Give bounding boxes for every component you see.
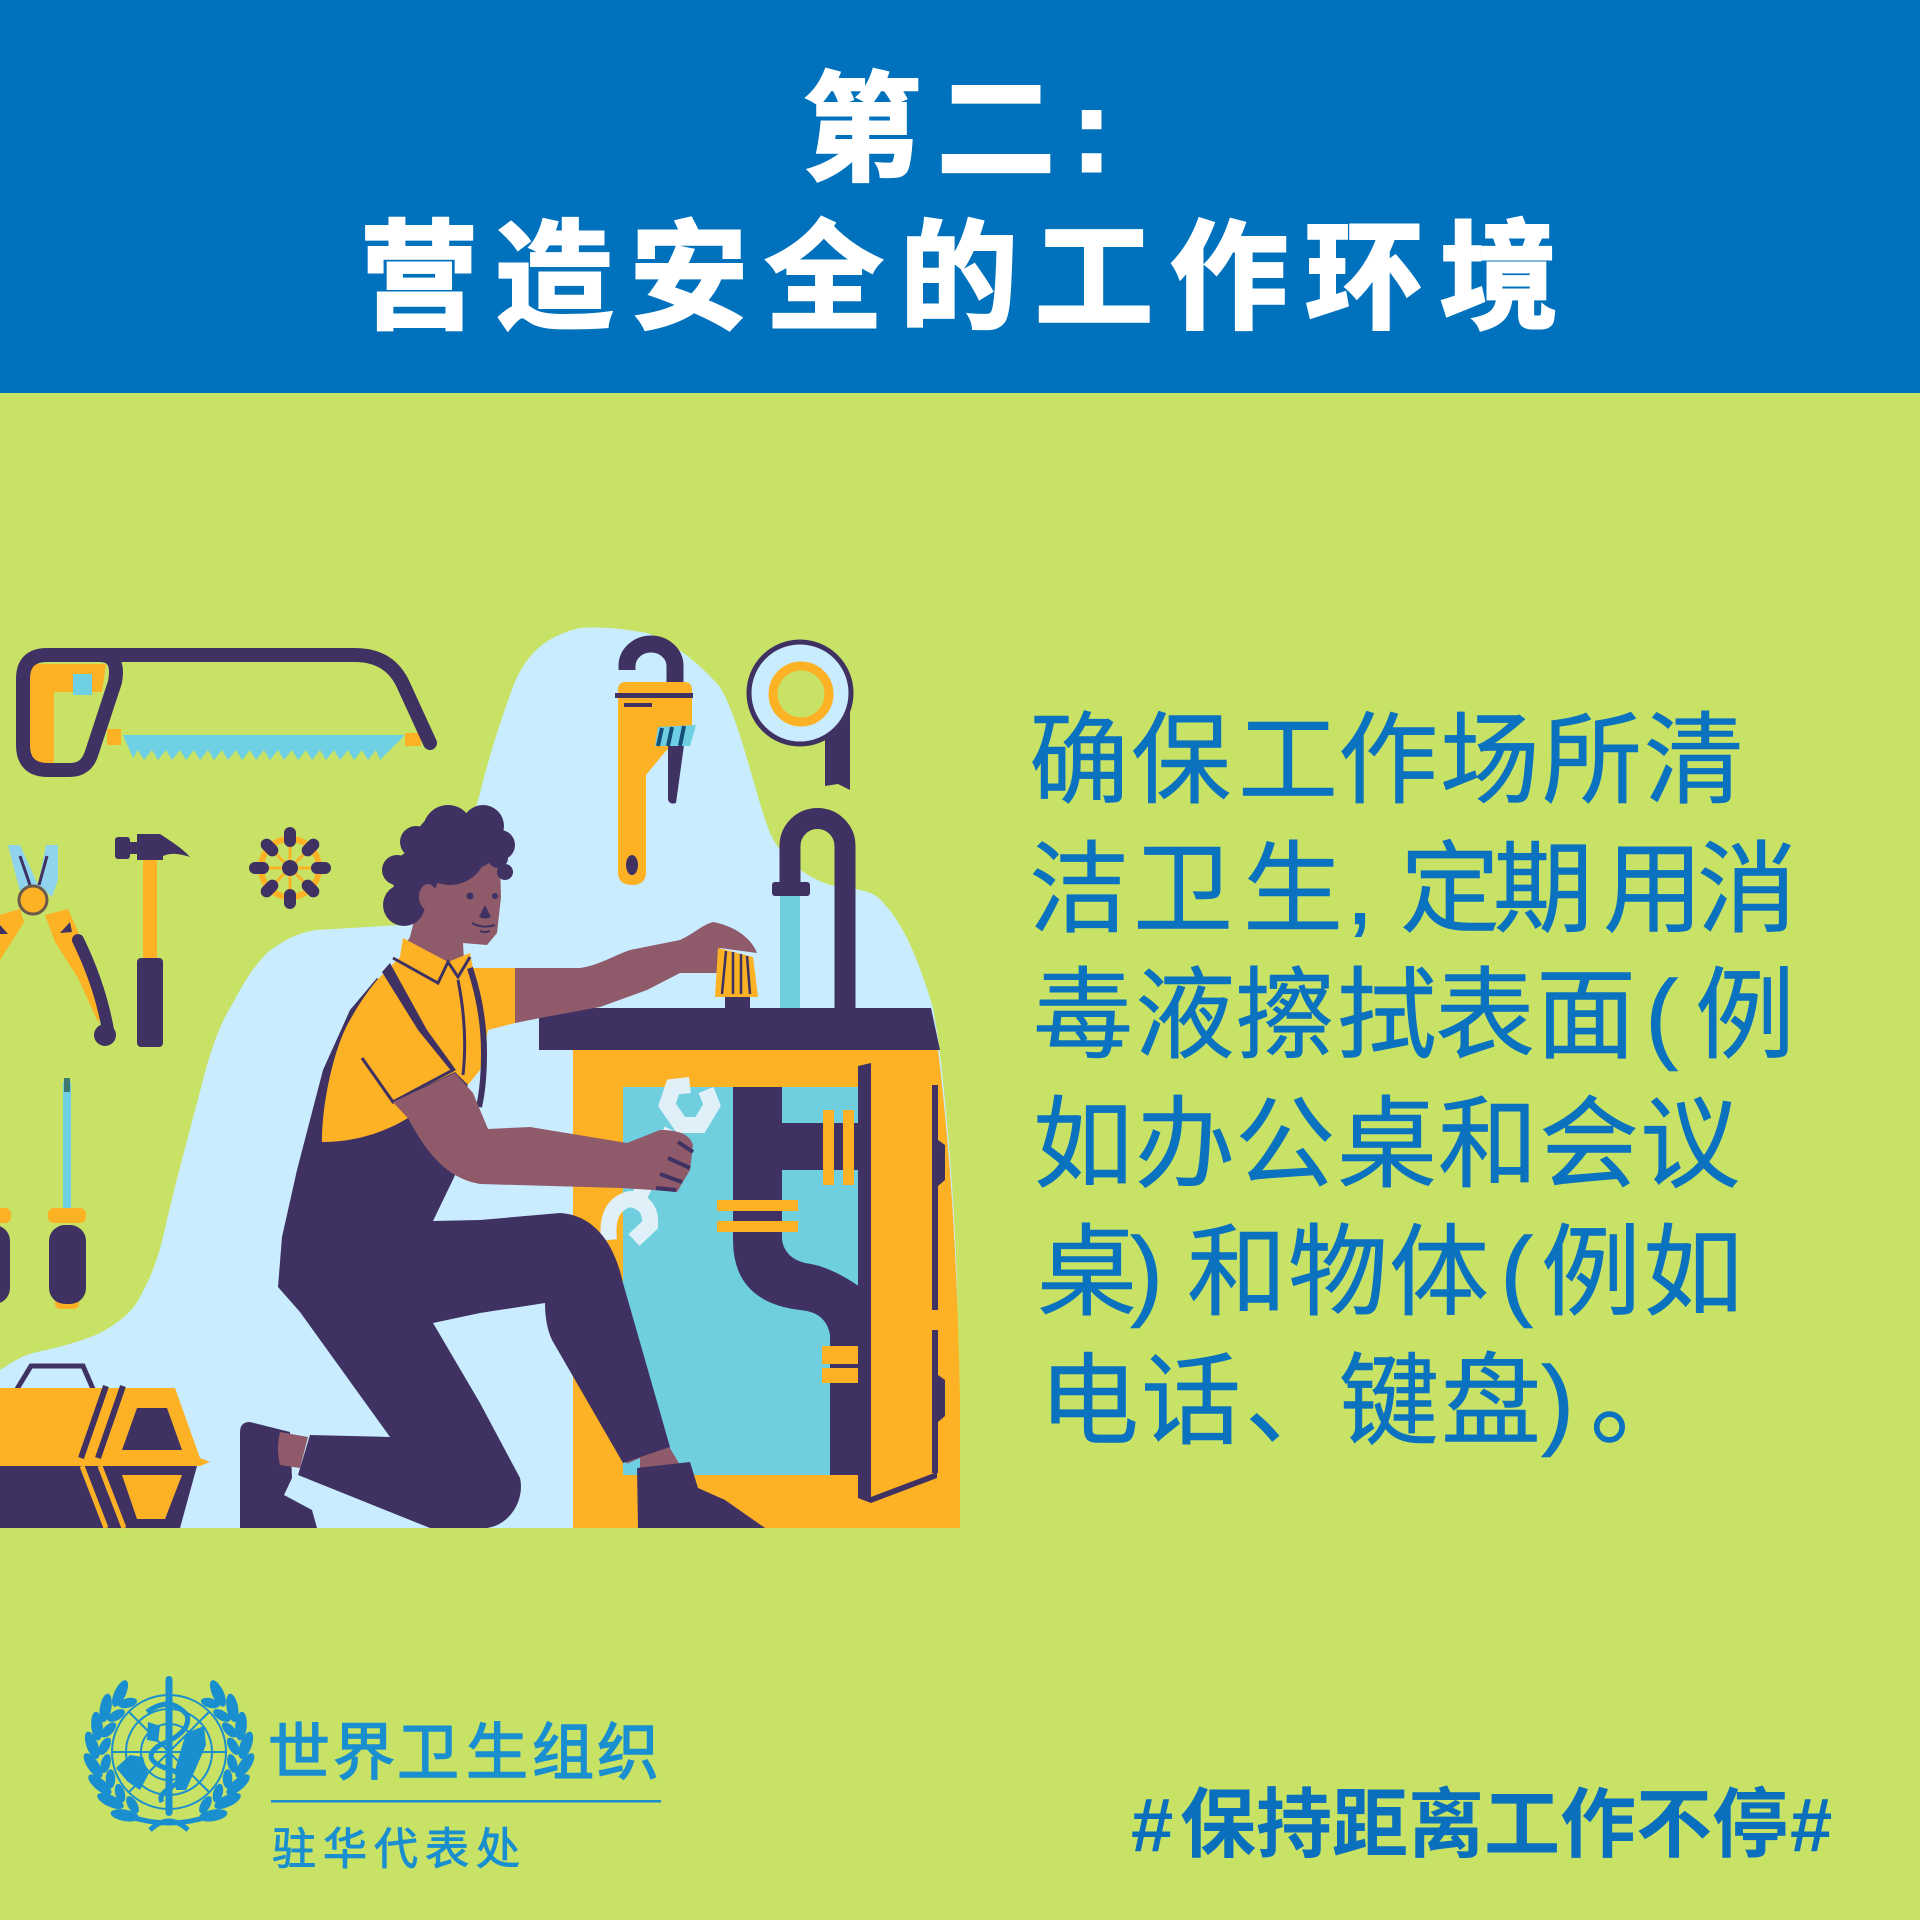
line 1: 确保工作场所清 [1029, 705, 1744, 817]
trousers [278, 978, 670, 1528]
body text [1029, 705, 1797, 1458]
mouth [472, 923, 495, 932]
eyes [466, 892, 498, 900]
back ankle [278, 1432, 308, 1468]
back boot [240, 1422, 317, 1528]
sink knob [725, 996, 750, 1010]
nose [479, 905, 491, 918]
collar and sleeve lines [362, 957, 470, 1102]
line 2: 洁卫生,定期用消 [1029, 834, 1797, 946]
laurel ribbon [128, 1816, 210, 1830]
saw [23, 655, 430, 770]
illustration: plumber fixing a sink [0, 627, 960, 1528]
divider rule [271, 1800, 661, 1802]
upper arm and hand [515, 922, 757, 1023]
lower arm and hand [393, 1073, 693, 1192]
front ankle [625, 1445, 680, 1470]
plumber figure [240, 805, 765, 1528]
line 5: 桌)和物体(例如 [1037, 1217, 1743, 1329]
laurel left [80, 1678, 141, 1824]
WHO logo [80, 1676, 258, 1830]
WHO wordmark [268, 1719, 661, 1874]
line 3: 毒液擦拭表面(例 [1033, 960, 1795, 1072]
continents [116, 1722, 206, 1790]
screwdrivers [0, 1078, 86, 1309]
serpent [147, 1704, 188, 1802]
countertop [539, 1008, 940, 1050]
header band [0, 0, 1920, 393]
gear flower [249, 827, 331, 909]
sink cabinet [539, 1008, 960, 1528]
water stream [780, 896, 800, 1010]
faucet [772, 818, 845, 1012]
ear [419, 884, 437, 910]
overall straps [382, 963, 456, 1072]
organisation name: 世界卫生组织 [268, 1719, 659, 1788]
staff [166, 1676, 172, 1816]
light blue background blob [0, 627, 960, 1528]
neck and face [405, 862, 501, 985]
hammer [115, 834, 190, 1047]
line 4: 如办公桌和会议 [1033, 1089, 1740, 1201]
front boot [637, 1462, 765, 1528]
hair [382, 805, 515, 926]
shirt [322, 938, 515, 1142]
hashtag: #保持距离工作不停# [1131, 1783, 1832, 1868]
pipes [733, 1087, 860, 1475]
toolbox [0, 1366, 210, 1528]
globe [112, 1695, 226, 1809]
pipe wrench [615, 644, 696, 885]
laurel right [197, 1678, 258, 1824]
tape roll [749, 642, 851, 790]
open door [858, 1063, 937, 1503]
pliers [0, 845, 116, 1046]
line 6: 电话、键盘)。 [1039, 1346, 1690, 1458]
title line 2: 营造安全的工作环境 [360, 213, 1575, 345]
office name: 驻华代表处 [272, 1825, 527, 1874]
title line 1: 第二: [803, 65, 1111, 197]
spanner in hand [608, 1085, 712, 1240]
